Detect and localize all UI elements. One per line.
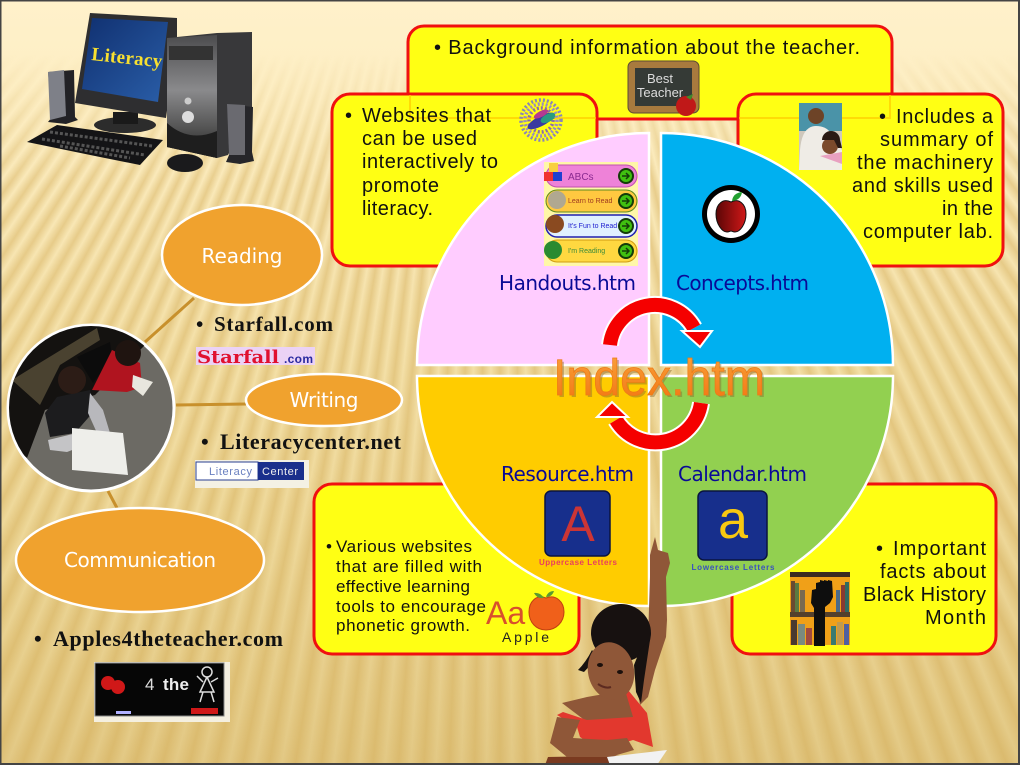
paper — [607, 750, 667, 763]
text: websites: • — [345, 105, 352, 127]
speaker right — [226, 104, 254, 164]
icon: reading buttons: It's Fun to Read — [568, 223, 617, 230]
text: websites: literacy. — [362, 198, 433, 220]
text: black history — [863, 538, 986, 629]
label: calendar: Calendar.htm — [678, 462, 807, 486]
text: websites: interactively to — [362, 151, 498, 173]
icon: Aa apple logo: Apple — [502, 629, 549, 645]
arrow: top clockwise — [610, 305, 712, 347]
screen — [82, 18, 168, 102]
quadrant: handouts — [417, 133, 649, 365]
text: black history: Important — [893, 538, 986, 560]
shoulders and chest — [562, 694, 633, 720]
red top — [557, 690, 653, 750]
text: black history: Black History — [863, 584, 986, 606]
icon: lowercase a tile: a — [718, 490, 749, 550]
text: machinery and skills: and skills used — [852, 175, 993, 197]
text: background information: • Background information about the teacher. — [434, 37, 860, 59]
icon: computer with Literacy screen — [27, 13, 254, 172]
panel: black history — [732, 484, 996, 654]
logo: Apples 4 the teacher: 4 — [145, 675, 154, 694]
text: learning tools: phonetic growth. — [336, 616, 470, 635]
icon: Aa apple logo — [486, 591, 564, 645]
text: learning tools: • — [326, 537, 332, 556]
text: learning tools — [326, 537, 486, 635]
link: Starfall: • — [196, 312, 203, 336]
near arm — [550, 717, 634, 757]
text: websites — [345, 105, 498, 220]
desk — [546, 756, 620, 763]
oval: reading — [162, 205, 322, 305]
text: learning tools: effective learning — [336, 577, 470, 596]
oval: communication — [16, 508, 264, 612]
link: Apples4theteacher: • — [34, 626, 42, 651]
icon: teacher and child photo — [799, 103, 842, 170]
chart: four-part pie — [417, 133, 893, 606]
text: machinery and skills: summary of — [880, 129, 993, 151]
text: machinery and skills — [852, 106, 994, 243]
logo: Starfall: Starfall — [197, 347, 279, 368]
icon: reading buttons: Learn to Read — [568, 198, 612, 205]
quadrant: calendar — [661, 376, 893, 606]
raised arm — [636, 537, 670, 705]
logo: Starfall — [196, 347, 315, 368]
text: learning tools: that are filled with — [336, 557, 482, 576]
label: resource: Resource.htm — [501, 462, 634, 486]
title: Index.htm: Index.htm — [555, 351, 767, 408]
text: black history: • — [876, 538, 883, 560]
panel: websites — [332, 94, 597, 266]
label: concepts: Concepts.htm — [676, 271, 809, 295]
oval: reading: Reading — [202, 244, 282, 268]
icon: bookshelf with fist — [790, 572, 850, 646]
text: websites: promote — [362, 175, 439, 197]
icon: apple badge — [702, 185, 760, 243]
text: machinery and skills: computer lab. — [863, 221, 993, 243]
icon: reading buttons — [544, 162, 638, 266]
icon: best teacher chalkboard: Best — [647, 71, 673, 86]
icon: uppercase A tile — [539, 491, 618, 567]
logo: Literacy Center: Literacy — [209, 466, 252, 478]
icon: best teacher chalkboard: Teacher — [637, 85, 684, 100]
logo: Apples 4 the teacher: the — [163, 675, 189, 694]
photo: children writing — [5, 320, 174, 491]
logo: Apples 4 the teacher — [94, 662, 230, 722]
arrow: bottom clockwise — [597, 402, 701, 442]
hair — [578, 604, 651, 703]
text: black history: Month — [925, 607, 986, 629]
connector lines — [108, 298, 246, 508]
link: Starfall: Starfall.com — [214, 312, 334, 336]
speaker left — [48, 70, 78, 124]
oval: writing — [246, 374, 402, 426]
panel: learning tools — [314, 484, 579, 654]
icon: reading buttons: ABCs — [568, 172, 594, 183]
keyboard — [27, 125, 163, 165]
text: learning tools: Various websites — [336, 537, 472, 556]
quadrant: resource — [417, 376, 649, 606]
monitor stand — [94, 112, 156, 133]
panel: background information — [408, 26, 892, 119]
face — [588, 642, 634, 695]
mouse — [167, 154, 203, 172]
text: machinery and skills: the machinery — [857, 152, 993, 174]
icon: uppercase A tile: Uppercase Letters — [539, 558, 618, 567]
title: Index.htm: Index.htm — [553, 349, 765, 406]
tower — [167, 32, 252, 158]
text: machinery and skills: Includes a — [896, 106, 994, 128]
logo: Literacy Center — [195, 460, 309, 488]
oval: communication: Communication — [64, 548, 216, 572]
monitor — [75, 13, 177, 118]
panel: machinery and skills — [738, 94, 1003, 266]
text: learning tools: tools to encourage — [336, 597, 486, 616]
link: Apples4theteacher: Apples4theteacher.com — [53, 626, 283, 651]
text: machinery and skills: • — [879, 106, 886, 128]
logo: Starfall: .com — [284, 352, 313, 366]
icon: reading buttons: I'm Reading — [568, 248, 605, 255]
icon: lowercase a tile: Lowercase Letters — [692, 563, 775, 572]
illustration: girl raising hand — [545, 537, 670, 765]
icon: best teacher chalkboard — [628, 61, 699, 116]
icon: molecule ball — [521, 100, 561, 140]
icon: Aa apple logo: Aa — [486, 595, 525, 631]
icon: uppercase A tile: A — [561, 496, 595, 552]
text: websites: can be used — [362, 128, 477, 150]
icon: lowercase a tile — [692, 490, 775, 572]
text: machinery and skills: in the — [942, 198, 993, 220]
link: Literacy Center: • — [201, 429, 209, 454]
screen word: Literacy — [90, 44, 164, 72]
logo: Literacy Center: Center — [262, 466, 298, 478]
text: websites: Websites that — [362, 105, 491, 127]
quadrant: concepts — [661, 133, 893, 365]
label: handouts: Handouts.htm — [499, 271, 636, 295]
link: Literacy Center: Literacycenter.net — [220, 429, 402, 454]
oval: writing: Writing — [290, 388, 358, 412]
text: black history: facts about — [880, 561, 986, 583]
